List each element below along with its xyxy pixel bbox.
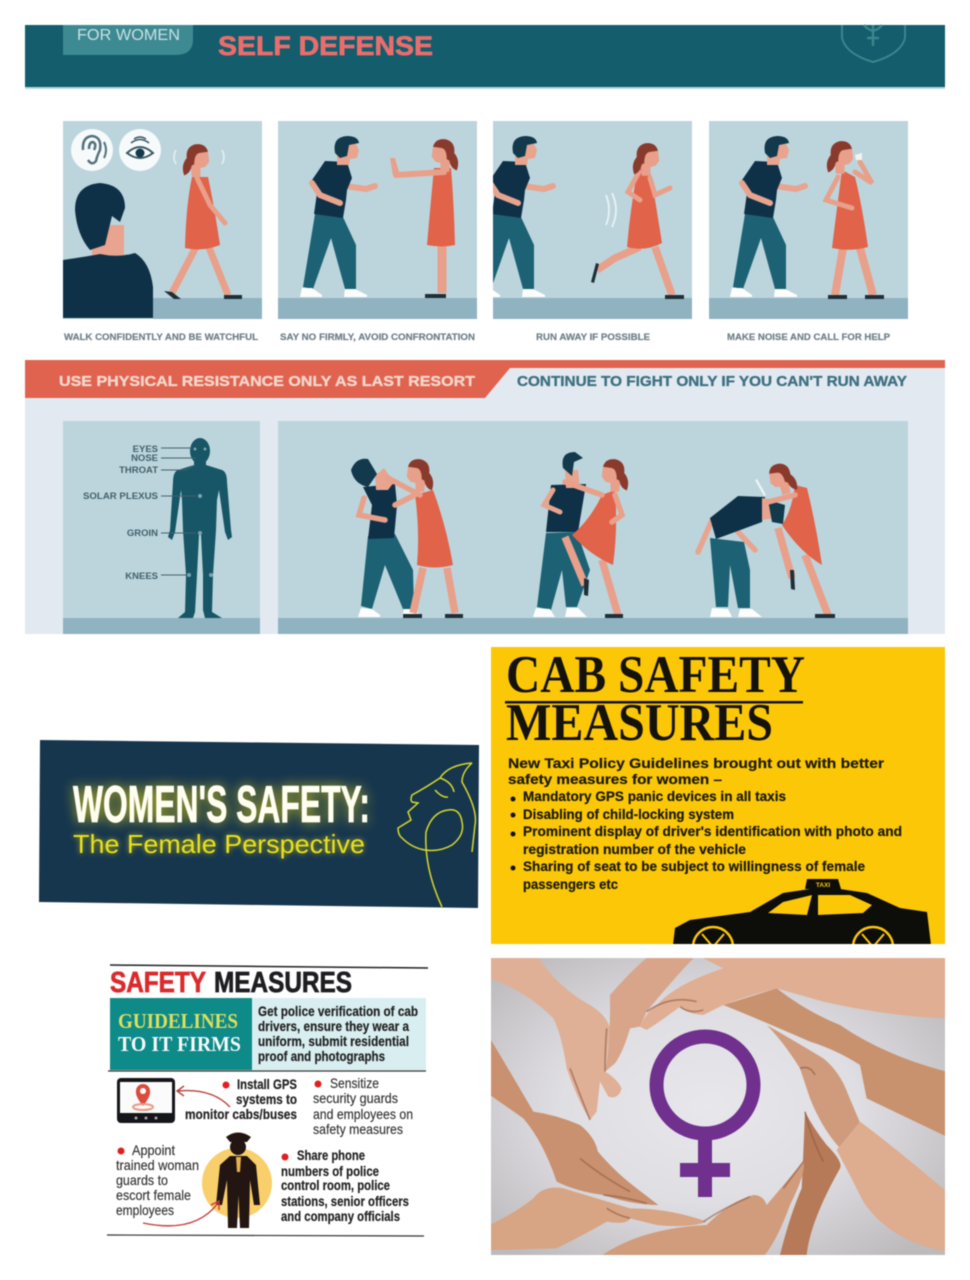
panel: fighting back scenes bbox=[278, 421, 908, 634]
guidelines text: safety measures for women – bbox=[508, 771, 722, 787]
hands ring bbox=[490, 955, 947, 1257]
scene: strike to face bbox=[351, 459, 463, 618]
guidelines block: proof and photographs bbox=[258, 1048, 385, 1064]
right hand fingers bbox=[767, 1025, 862, 1152]
bottom-left hand bbox=[490, 1188, 707, 1250]
hand from top centre bbox=[605, 955, 697, 1072]
bottom palm bbox=[600, 1162, 804, 1257]
caption: WALK CONFIDENTLY AND BE WATCHFUL bbox=[64, 332, 258, 343]
bullet: appoint guards: escort female bbox=[116, 1187, 191, 1203]
bullet: appoint guards: Appoint bbox=[132, 1142, 175, 1158]
guidelines text: passengers etc bbox=[523, 876, 618, 892]
icon: eye bbox=[119, 129, 161, 171]
body labels: GROIN bbox=[127, 528, 158, 539]
header band: SELF DEFENSE bbox=[218, 31, 433, 61]
woman running bbox=[591, 143, 684, 299]
lower right arm bbox=[837, 1122, 947, 1252]
bullet: share phone numbers bbox=[281, 1147, 409, 1224]
panel: self defense for women bbox=[25, 25, 945, 634]
body labels: SOLAR PLEXUS bbox=[83, 491, 158, 502]
female symbol bbox=[656, 1036, 754, 1197]
icon: security guard bbox=[202, 1132, 272, 1228]
title: SAFETY bbox=[110, 967, 206, 999]
bullet: install gps: systems to bbox=[236, 1091, 297, 1107]
bullet: install gps: monitor cabs/buses bbox=[185, 1106, 297, 1122]
title bbox=[110, 967, 352, 999]
left arm and hand bbox=[490, 1038, 658, 1205]
bullet: appoint guards bbox=[116, 1142, 199, 1218]
guidelines block: drivers, ensure they wear a bbox=[258, 1018, 409, 1034]
title: MEASURES bbox=[506, 694, 773, 752]
glow title: WOMEN'S SAFETY: bbox=[73, 776, 370, 834]
woman calling bbox=[826, 141, 884, 299]
guidelines text: Disabling of child-locking system bbox=[523, 806, 734, 822]
panel: vulnerable body points bbox=[63, 421, 260, 634]
icon: ear bbox=[71, 129, 113, 171]
bullet: share phone numbers: and company officials bbox=[281, 1208, 400, 1224]
body labels: NOSE bbox=[131, 453, 158, 464]
caption: SAY NO FIRMLY, AVOID CONFRONTATION bbox=[280, 332, 475, 343]
title: CAB SAFETY bbox=[506, 646, 805, 704]
right upper arm bbox=[723, 988, 947, 1137]
title: MEASURES bbox=[214, 967, 352, 999]
woman stop gesture bbox=[390, 139, 458, 298]
guidelines block: TO IT FIRMS bbox=[118, 1032, 241, 1056]
man seen from behind bbox=[63, 183, 153, 318]
bullet: sensitize: security guards bbox=[313, 1090, 398, 1106]
leader lines bbox=[161, 448, 196, 575]
coral banner: CONTINUE TO FIGHT ONLY IF YOU CAN'T RUN AWAY bbox=[517, 373, 907, 390]
guidelines text: Prominent display of driver's identification with photo and bbox=[523, 823, 902, 839]
guidelines text: Mandatory GPS panic devices in all taxis bbox=[523, 788, 786, 804]
guidelines text: Sharing of seat to be subject to willingness of female bbox=[523, 858, 865, 874]
caption: RUN AWAY IF POSSIBLE bbox=[536, 332, 650, 343]
bullet: sensitize bbox=[313, 1075, 413, 1137]
icon: gps tablet bbox=[117, 1078, 175, 1123]
guidelines text bbox=[508, 755, 902, 892]
bullet: share phone numbers: Share phone bbox=[297, 1147, 365, 1163]
icon: taxi bbox=[672, 878, 932, 945]
bullet: appoint guards: employees bbox=[116, 1202, 174, 1218]
header band bbox=[25, 25, 945, 89]
bullet: share phone numbers: control room, police bbox=[281, 1177, 390, 1193]
step 2: say no firmly bbox=[278, 121, 477, 343]
body labels: KNEES bbox=[125, 571, 158, 582]
guidelines text: New Taxi Policy Guidelines brought out with better bbox=[508, 755, 885, 771]
banner: women's safety bbox=[39, 740, 479, 908]
coral banner bbox=[25, 360, 945, 398]
bullet: appoint guards: trained woman bbox=[116, 1157, 199, 1173]
arrow to guard bbox=[143, 1201, 219, 1226]
subtitle: The Female Perspective bbox=[73, 829, 365, 859]
step 1: walk confidently bbox=[63, 121, 262, 343]
bullet: appoint guards: guards to bbox=[116, 1172, 168, 1188]
top right forearm and hand bbox=[640, 955, 947, 1030]
guidelines block: Get police verification of cab bbox=[258, 1003, 418, 1019]
scene: knee strike bbox=[533, 452, 628, 618]
body labels: EYES bbox=[133, 444, 158, 455]
guidelines block bbox=[110, 998, 426, 1070]
arrow to tablet bbox=[177, 1086, 230, 1107]
panel: cab safety measures bbox=[491, 646, 945, 967]
panel: hands around female symbol bbox=[490, 955, 947, 1257]
guidelines block: GUIDELINES bbox=[118, 1009, 238, 1033]
man bbox=[730, 136, 805, 297]
header band: FOR WOMEN bbox=[77, 27, 180, 44]
body labels bbox=[83, 444, 158, 582]
icon: taxi: TAXI bbox=[816, 882, 830, 889]
body labels: THROAT bbox=[119, 465, 158, 476]
coral banner: USE PHYSICAL RESISTANCE ONLY AS LAST RESORT bbox=[59, 373, 475, 390]
bullet: share phone numbers: numbers of police bbox=[281, 1163, 379, 1179]
step 4: make noise bbox=[709, 121, 908, 343]
woman walking bbox=[164, 144, 242, 299]
step 3: run away bbox=[478, 121, 692, 343]
top-left arm and hand bbox=[490, 955, 622, 1120]
line art face bbox=[398, 763, 475, 907]
scene: head push and knee bbox=[698, 460, 835, 618]
bullet: share phone numbers: stations, senior officers bbox=[281, 1193, 409, 1209]
lower right hand bbox=[780, 1112, 841, 1255]
bullet: sensitize: Sensitize bbox=[330, 1075, 379, 1091]
guidelines block: uniform, submit residential bbox=[258, 1033, 409, 1049]
bullet: sensitize: safety measures bbox=[313, 1121, 403, 1137]
man bbox=[492, 135, 556, 298]
finger creases bbox=[570, 1000, 823, 1222]
body silhouette bbox=[168, 438, 232, 618]
title bbox=[505, 646, 805, 752]
guidelines text: registration number of the vehicle bbox=[523, 841, 746, 857]
caption: MAKE NOISE AND CALL FOR HELP bbox=[727, 332, 891, 343]
bullet: install gps: Install GPS bbox=[237, 1076, 297, 1092]
bullet: install gps bbox=[185, 1076, 297, 1122]
bullet: sensitize: and employees on bbox=[313, 1106, 413, 1122]
man bbox=[300, 136, 375, 297]
panel: safety measures guidelines bbox=[107, 965, 428, 1236]
